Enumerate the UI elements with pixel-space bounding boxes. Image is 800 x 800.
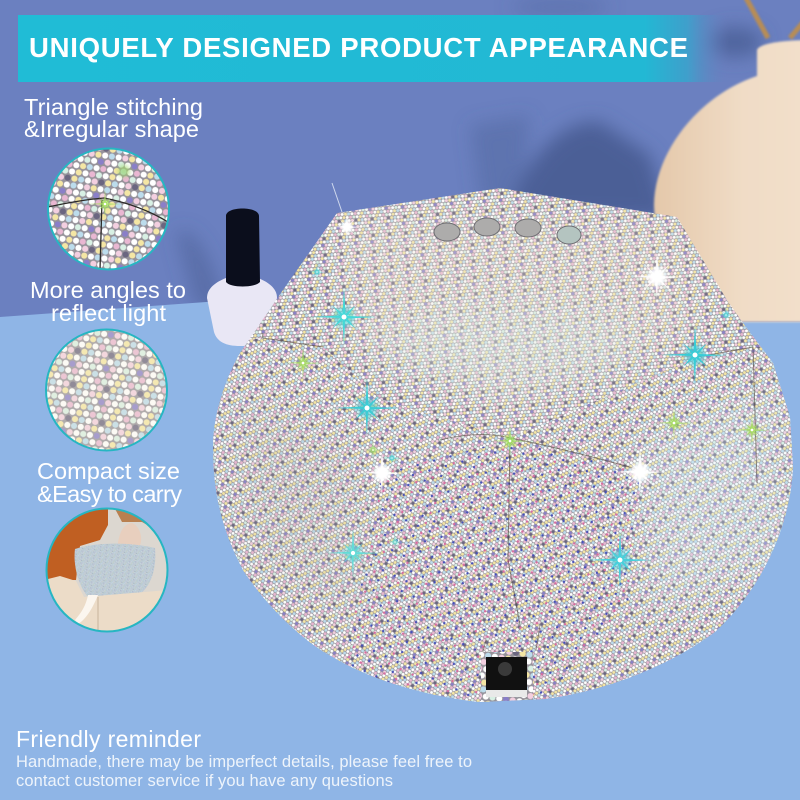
background: table surface — [0, 300, 800, 800]
vase — [654, 0, 800, 322]
inset dome sparkle texture — [75, 544, 155, 597]
power port — [481, 652, 533, 702]
inset orange sleeve — [48, 510, 108, 580]
feature 2 heading: reflect light — [51, 300, 166, 326]
title text: UNIQUELY DESIGNED PRODUCT APPEARANCE — [29, 32, 688, 63]
sparkles — [284, 213, 771, 590]
bottle cap — [226, 208, 260, 286]
nail polish bottle — [207, 208, 277, 346]
product: rhinestone dome lamp — [200, 180, 800, 705]
control buttons — [434, 218, 581, 244]
banner background — [18, 15, 730, 82]
tonal shading — [240, 210, 790, 620]
bottle glass — [207, 278, 277, 346]
note body: Handmade, there may be imperfect details, please feel free to — [16, 753, 472, 771]
light ray above the dome corner — [332, 183, 342, 212]
feature 1 heading: &Irregular shape — [24, 116, 199, 142]
inset cream box — [48, 576, 163, 630]
friendly reminder note — [16, 726, 472, 790]
feature 2 inset: rhinestone close-up — [43, 326, 170, 453]
inset dome lamp — [75, 544, 155, 597]
vase body — [654, 40, 800, 322]
background: wall — [0, 0, 800, 330]
facet seams — [262, 333, 757, 655]
background: plant shadows on wall — [176, 0, 763, 315]
center lower facet coloured stones — [340, 440, 640, 705]
inset wall — [73, 510, 166, 597]
feature 1 heading: Triangle stitching — [24, 94, 203, 120]
title banner — [18, 15, 730, 82]
feature 3 heading: Compact size — [37, 458, 180, 484]
vase stems — [745, 0, 800, 38]
feature 3 inset: carried in bag — [44, 505, 170, 640]
note body: contact customer service if you have any questions — [16, 772, 393, 790]
feature 3 heading: &Easy to carry — [37, 481, 182, 507]
inset hand — [118, 523, 141, 545]
feature 2 heading: More angles to — [30, 277, 186, 303]
feature 1 inset: seam close-up — [45, 146, 171, 272]
lower faceted panels — [200, 338, 800, 705]
note heading: Friendly reminder — [16, 726, 201, 752]
